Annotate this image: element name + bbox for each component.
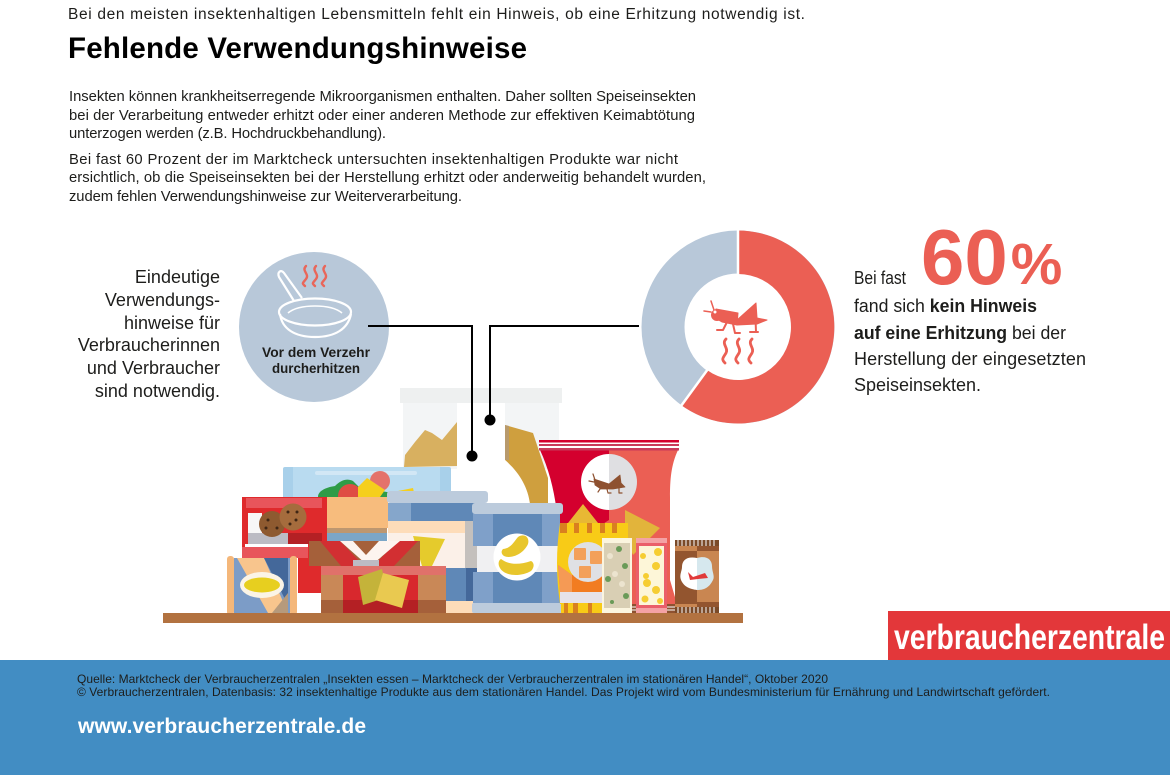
brown cricket package (675, 540, 719, 613)
shelf board (163, 613, 743, 623)
footer band (0, 660, 1170, 775)
icon: pan in circle (239, 252, 389, 402)
text block: second paragraph (69, 152, 706, 205)
icon: pan (278, 271, 351, 337)
text block: 60 percent statement (854, 213, 1086, 395)
big number: 60% (921, 213, 1062, 301)
illustration: shelf with insect products (163, 388, 743, 623)
text block: 60 percent statement: Bei fast (854, 268, 906, 288)
leader line: pan (368, 326, 478, 462)
blue snack jar (472, 503, 563, 613)
blue tray with salad (283, 467, 451, 508)
orange package (327, 497, 388, 542)
text block: 60 percent statement: auf eine Erhitzung bei der (854, 323, 1066, 343)
source text: © Verbraucherzentralen, Datenbasis: 32 insektenhaltige Produkte aus dem stationären Handel. Das Projekt wird vom Bundesministerium für Ernährung und Landwirtschaft gefördert. (77, 685, 1050, 699)
pan label: Vor dem Verzehr (262, 345, 371, 360)
text block: left statement (78, 267, 220, 401)
stripes behind bars (632, 604, 677, 613)
text block: 60 percent statement: fand sich kein Hinweis (854, 296, 1037, 316)
pasta bag (400, 388, 562, 504)
title: Fehlende Verwendungshinweise (68, 32, 527, 65)
red cookie box (242, 497, 327, 593)
brown plaid packages (309, 541, 446, 613)
text block: first paragraph: bei der Verarbeitung entweder erhitzt oder einer anderen Methode zur effektiven Keimabtötung (69, 108, 695, 124)
text block: left statement: Verbraucherinnen (78, 335, 220, 355)
cricket icon on bag (589, 474, 625, 493)
red cricket bag (539, 440, 679, 604)
granola bar (602, 538, 632, 613)
text block: left statement: Verwendungs- (105, 290, 220, 310)
text block: second paragraph: ersichtlich, ob die Speiseinsekten bei der Herstellung erhitzt oder anderweitig behandelt wurden, (69, 170, 706, 186)
text block: first paragraph: unterzogen werden (z.B. Hochdruckbehandlung). (69, 126, 386, 142)
text block: left statement: hinweise für (124, 313, 220, 333)
yellow bar (636, 538, 667, 613)
text block: first paragraph: Insekten können krankheitserregende Mikroorganismen enthalten. Daher sollten Speiseinsekten (69, 89, 696, 105)
icon: cricket with steam (704, 301, 767, 363)
donut chart 60 percent (663, 229, 834, 423)
text block: left statement: Eindeutige (135, 267, 220, 287)
source text (77, 672, 1050, 699)
white jar (386, 491, 488, 613)
icon: steam (303, 266, 326, 286)
source text: Quelle: Marktcheck der Verbraucherzentralen „Insekten essen – Marktcheck der Verbraucherzentralen im stationären Handel“, Oktober 2020 (77, 672, 828, 686)
text block: second paragraph: zudem fehlen Verwendungshinweise zur Weiterverarbeitung. (69, 189, 462, 205)
intro line: Bei den meisten insektenhaltigen Lebensmitteln fehlt ein Hinweis, ob eine Erhitzung notwendig ist. (68, 6, 805, 23)
text block: 60 percent statement: Speiseinsekten. (854, 375, 981, 395)
text block: left statement: sind notwendig. (95, 381, 220, 401)
text block: 60 percent statement: Herstellung der eingesetzten (854, 349, 1086, 369)
website url: www.verbraucherzentrale.de (77, 715, 366, 738)
yellow chip bag (557, 504, 660, 613)
pan label: durcherhitzen (272, 361, 360, 376)
text block: first paragraph (69, 89, 696, 142)
wheat package (227, 556, 297, 615)
text block: left statement: und Verbraucher (87, 358, 220, 378)
leader line: donut (484, 326, 639, 426)
text block: second paragraph: Bei fast 60 Prozent der im Marktcheck untersuchten insektenhaltigen Produkte war nicht (69, 152, 678, 168)
pan label (262, 345, 371, 376)
